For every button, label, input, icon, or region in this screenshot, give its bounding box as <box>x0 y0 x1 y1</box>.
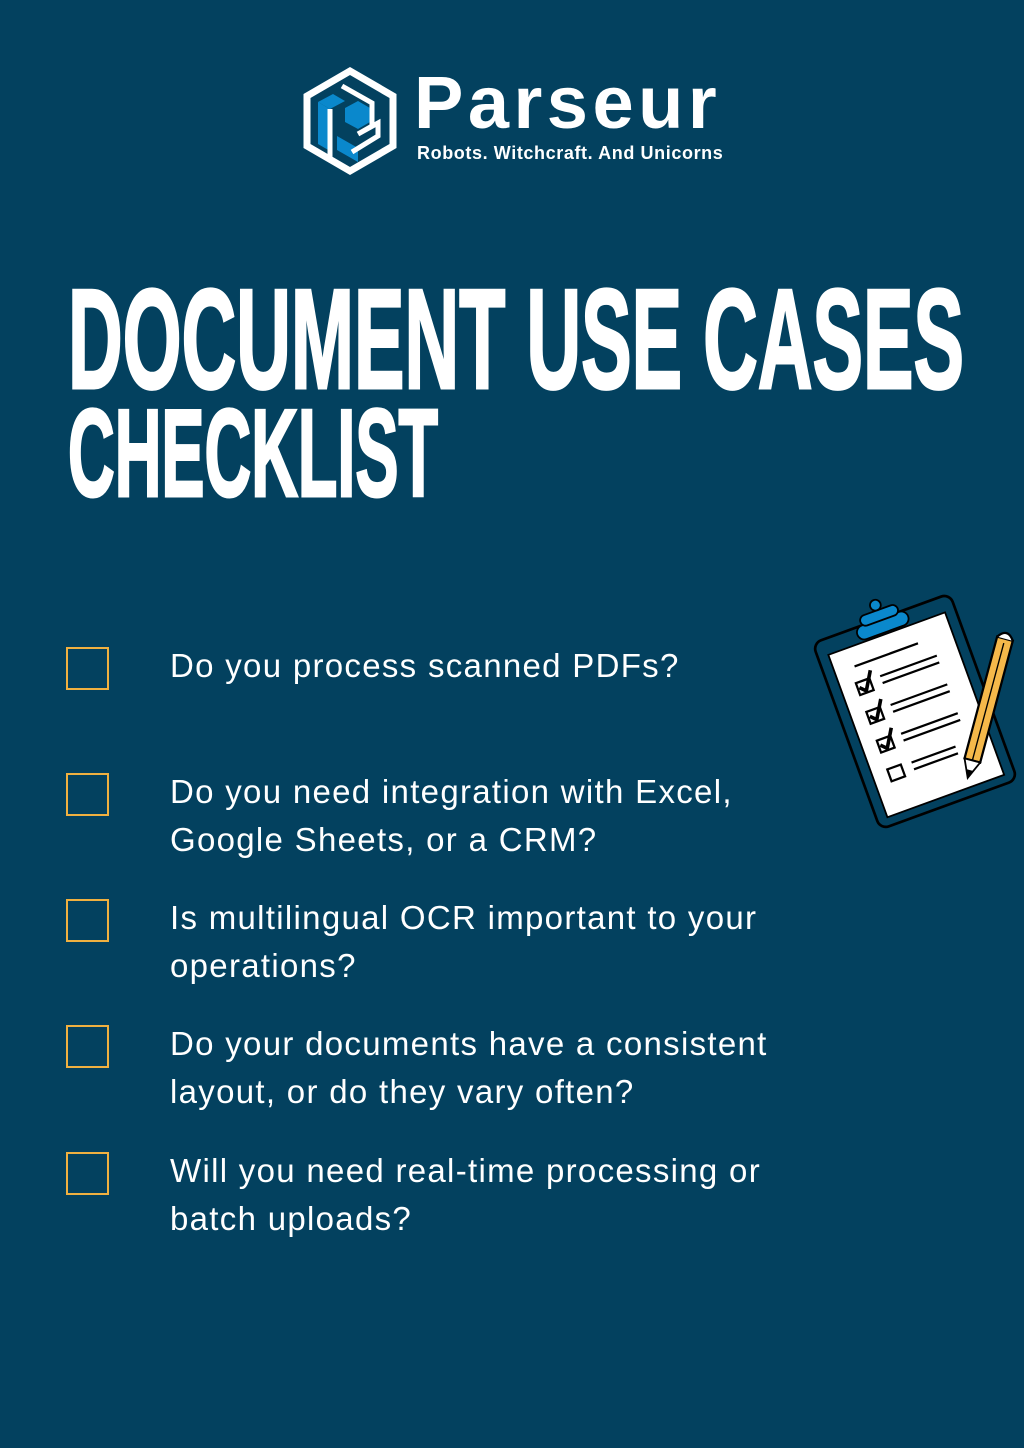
checklist item 4 <box>66 1025 768 1110</box>
icon: parseur hexagon <box>304 67 396 175</box>
checklist item 4: layout, or do they vary often? <box>170 1073 635 1110</box>
tagline: Robots. Witchcraft. And Unicorns <box>417 143 723 163</box>
checklist item 4: Do your documents have a consistent <box>170 1025 768 1062</box>
checklist item 5: batch uploads? <box>170 1200 412 1237</box>
checklist item 2: Google Sheets, or a CRM? <box>170 821 597 858</box>
checklist item 5 <box>66 1152 761 1237</box>
logo <box>304 61 723 175</box>
checklist item 3: operations? <box>170 947 357 984</box>
checklist item 2: Do you need integration with Excel, <box>170 773 733 810</box>
checklist item 1: Do you process scanned PDFs? <box>170 647 680 684</box>
checklist item 3 <box>66 899 757 984</box>
title <box>68 270 964 510</box>
checklist item 3: Is multilingual OCR important to your <box>170 899 757 936</box>
brand name: Parseur <box>414 61 721 144</box>
checklist item 5: Will you need real-time processing or <box>170 1152 761 1189</box>
icon: clipboard with pencil <box>814 594 1016 828</box>
checklist item 2 <box>66 773 733 858</box>
